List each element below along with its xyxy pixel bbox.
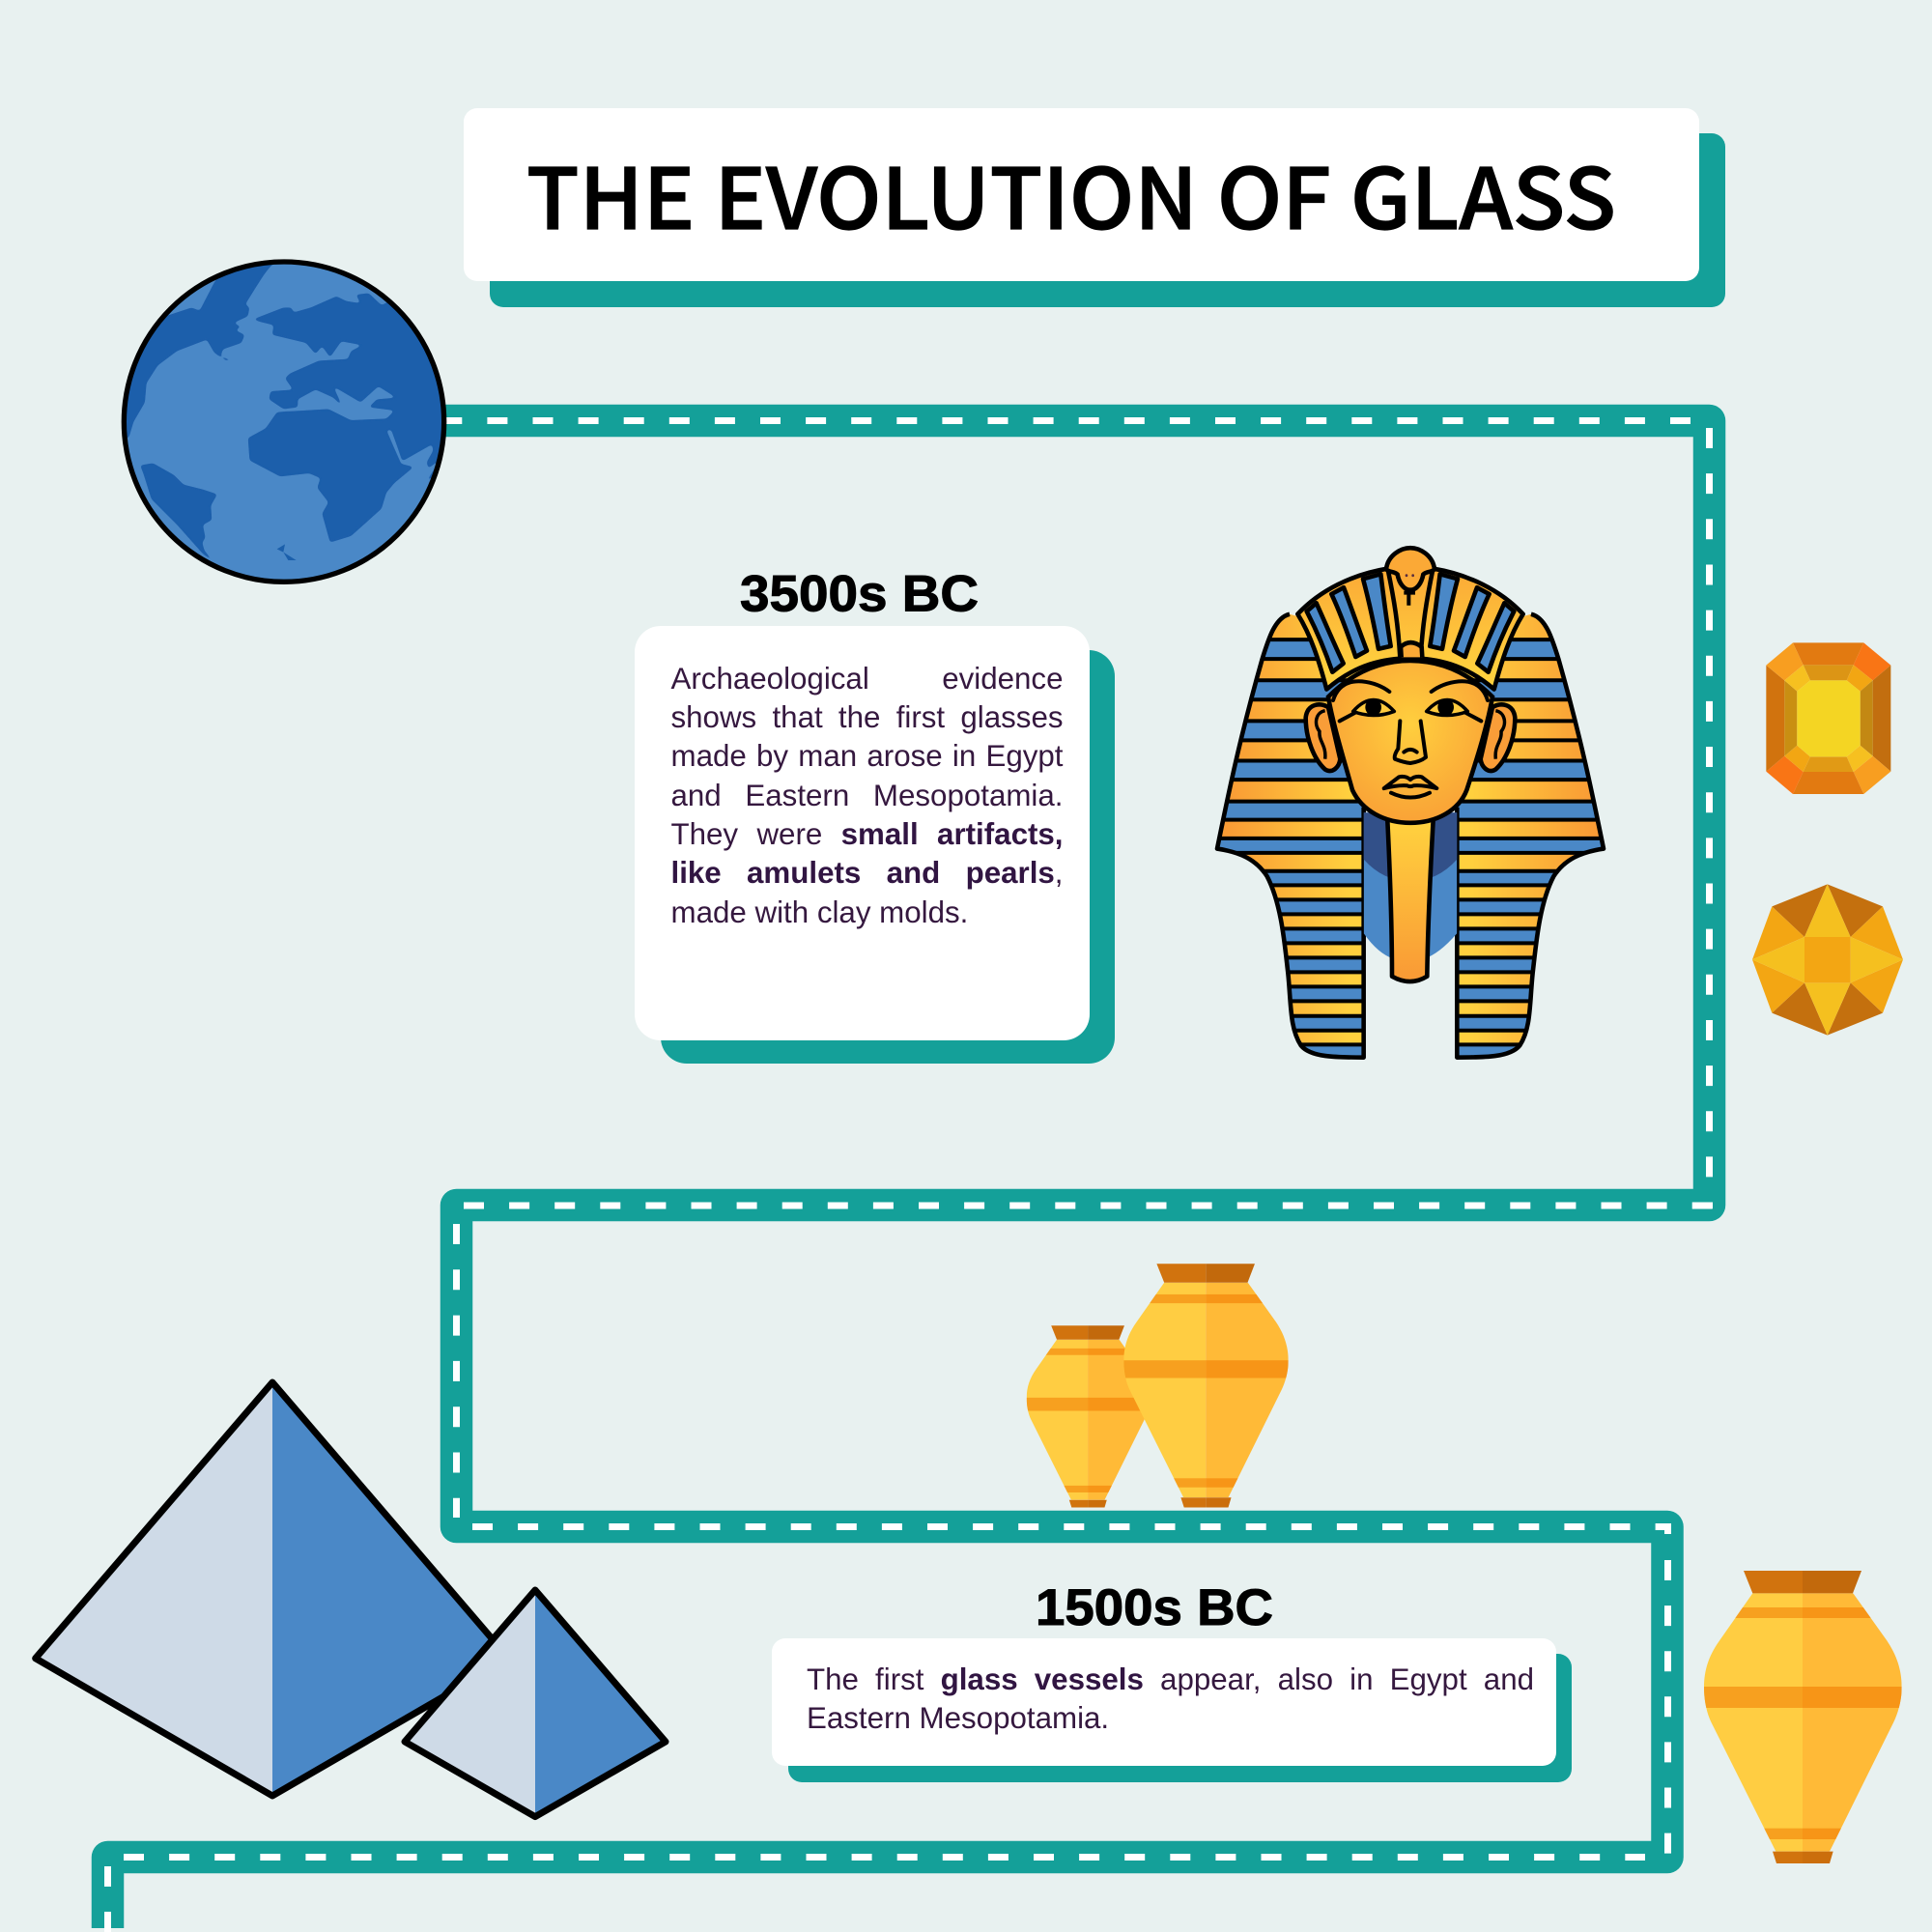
beard: [1387, 814, 1434, 981]
cobra: [1386, 548, 1435, 606]
facial features: [1333, 681, 1488, 798]
icon: large vase: [1700, 1571, 1906, 1863]
body text: and Eastern Mesopotamia.: [670, 779, 1063, 812]
icon: small vase on road: [1024, 1325, 1151, 1507]
body text: Archaeological evidence: [670, 662, 1063, 696]
body text: [670, 662, 1063, 929]
body text: [807, 1662, 1534, 1735]
body text: made by man arose in Egypt: [670, 739, 1063, 773]
body text: made with clay molds.: [670, 895, 968, 929]
icon: globe: [109, 258, 457, 582]
icon: pharaoh mask: [1195, 548, 1626, 1063]
icon: emerald-cut gem: [1766, 642, 1890, 794]
body text: They were small artifacts,: [670, 817, 1063, 851]
left nemes lappet: [1215, 612, 1366, 1060]
heading: 3500s BC: 3500s BC: [740, 566, 979, 623]
winding teal road path: [108, 421, 1713, 1932]
panel: title: [464, 108, 1725, 307]
right nemes lappet: [1455, 612, 1605, 1060]
body text: shows that the first glasses: [670, 700, 1063, 734]
panel: 1500s BC text card: [772, 1638, 1572, 1782]
face: [1328, 661, 1492, 823]
neck: [1364, 812, 1457, 957]
title text: THE EVOLUTION OF GLASS: [526, 132, 1616, 254]
body text: like amulets and pearls,: [670, 856, 1063, 890]
body text: Eastern Mesopotamia.: [807, 1700, 1109, 1735]
body text: The first glass vessels appear, also in Egypt and: [807, 1662, 1534, 1696]
icon: medium vase on road: [1121, 1264, 1292, 1508]
ears: [1306, 704, 1515, 771]
panel: 3500s BC text card: [635, 626, 1115, 1064]
crown headband: [1297, 569, 1523, 690]
icon: small pyramid: [405, 1590, 666, 1817]
heading: 1500s BC: 1500s BC: [1036, 1579, 1273, 1636]
icon: large pyramid: [36, 1382, 509, 1796]
icon: octagon gem: [1752, 884, 1903, 1036]
